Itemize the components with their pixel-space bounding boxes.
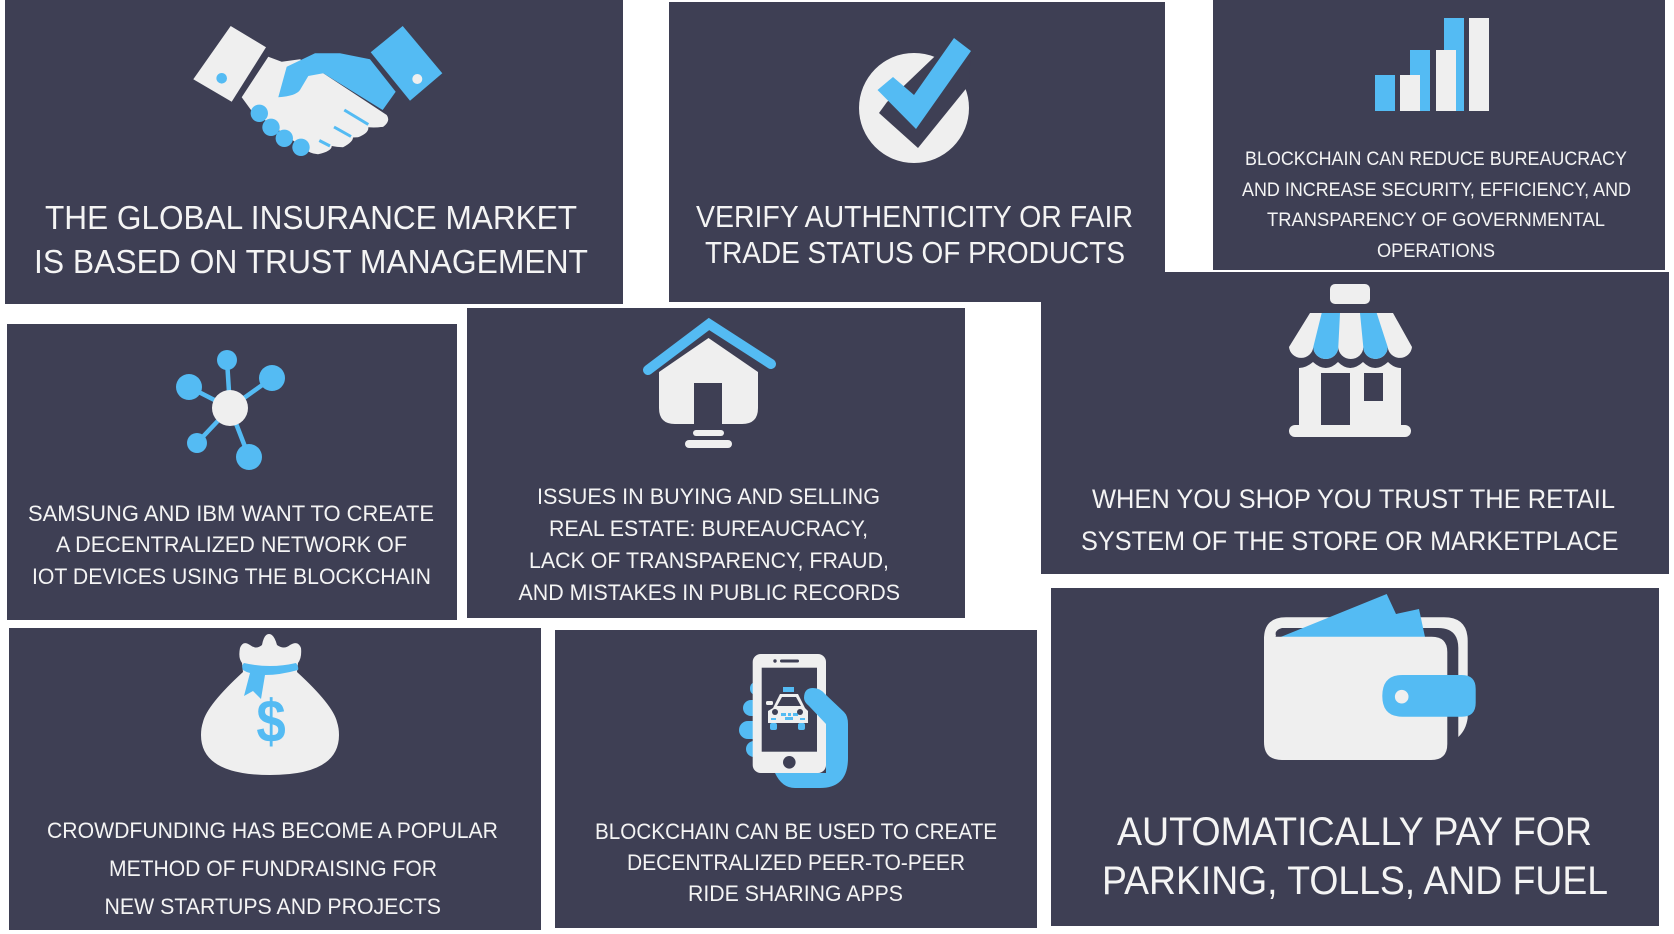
heading: insurance text: THE GLOBAL INSURANCE MARKET — [45, 199, 577, 236]
text block: IoT: IOT DEVICES USING THE BLOCKCHAIN — [32, 564, 431, 589]
panel: real estate — [467, 308, 965, 618]
icon: handshake — [193, 26, 442, 156]
panel: crowdfunding — [9, 628, 541, 930]
icon: house — [648, 324, 771, 448]
icon: storefront — [1289, 284, 1412, 437]
icon: check mark in circle — [859, 38, 971, 163]
text block: ride sharing: RIDE SHARING APPS — [688, 881, 903, 906]
icon: bar chart — [1375, 18, 1489, 111]
icon: network nodes — [176, 350, 285, 470]
text block: bureaucracy: BLOCKCHAIN CAN REDUCE BUREAUCRACY — [1245, 148, 1627, 170]
text block: IoT — [28, 501, 434, 589]
heading: verify text: TRADE STATUS OF PRODUCTS — [705, 236, 1125, 270]
panel: retail shop — [1041, 272, 1669, 574]
heading: insurance text: IS BASED ON TRUST MANAGEMENT — [34, 243, 588, 280]
heading: payment text — [1102, 810, 1608, 903]
panel: verify authenticity — [669, 2, 1165, 302]
text block: ride sharing — [595, 819, 997, 906]
panel: automatic payment — [1051, 588, 1659, 926]
text block: crowdfunding: CROWDFUNDING HAS BECOME A POPULAR — [47, 818, 498, 843]
text block: bureaucracy: AND INCREASE SECURITY, EFFICIENCY, AND — [1242, 179, 1631, 201]
heading: verify text: VERIFY AUTHENTICITY OR FAIR — [696, 200, 1133, 234]
heading: verify text — [696, 200, 1133, 270]
heading: insurance text — [34, 199, 588, 280]
panel: reduce bureaucracy — [1213, 0, 1665, 270]
text block: real estate: AND MISTAKES IN PUBLIC RECORDS — [518, 580, 900, 605]
text block: retail: WHEN YOU SHOP YOU TRUST THE RETAIL — [1092, 484, 1615, 514]
panel: IoT network — [7, 324, 457, 620]
text block: crowdfunding — [47, 818, 498, 919]
heading: payment text: AUTOMATICALLY PAY FOR — [1117, 810, 1592, 854]
text block: real estate — [518, 484, 900, 605]
heading: payment text: PARKING, TOLLS, AND FUEL — [1102, 859, 1608, 903]
panel: ride sharing — [555, 630, 1037, 928]
text block: real estate: LACK OF TRANSPARENCY, FRAUD, — [529, 548, 889, 573]
text block: real estate: REAL ESTATE: BUREAUCRACY, — [549, 516, 868, 541]
text block: IoT: A DECENTRALIZED NETWORK OF — [56, 532, 407, 557]
text block: bureaucracy — [1242, 148, 1631, 262]
text block: bureaucracy: OPERATIONS — [1377, 240, 1495, 262]
text block: ride sharing: DECENTRALIZED PEER-TO-PEER — [627, 850, 965, 875]
icon: money bag — [201, 634, 339, 775]
text block: retail: SYSTEM OF THE STORE OR MARKETPLACE — [1081, 526, 1618, 556]
text block: IoT: SAMSUNG AND IBM WANT TO CREATE — [28, 501, 434, 526]
icon: phone with taxi — [739, 654, 848, 788]
text block: crowdfunding: NEW STARTUPS AND PROJECTS — [104, 894, 441, 919]
text block: bureaucracy: TRANSPARENCY OF GOVERNMENTAL — [1267, 209, 1605, 231]
icon: wallet — [1264, 594, 1476, 760]
panel: insurance market — [5, 0, 623, 304]
text block: crowdfunding: METHOD OF FUNDRAISING FOR — [109, 856, 437, 881]
text block: retail — [1081, 484, 1618, 556]
text block: ride sharing: BLOCKCHAIN CAN BE USED TO CREATE — [595, 819, 997, 844]
icon: money bag: $ — [256, 688, 286, 755]
text block: real estate: ISSUES IN BUYING AND SELLING — [537, 484, 880, 509]
